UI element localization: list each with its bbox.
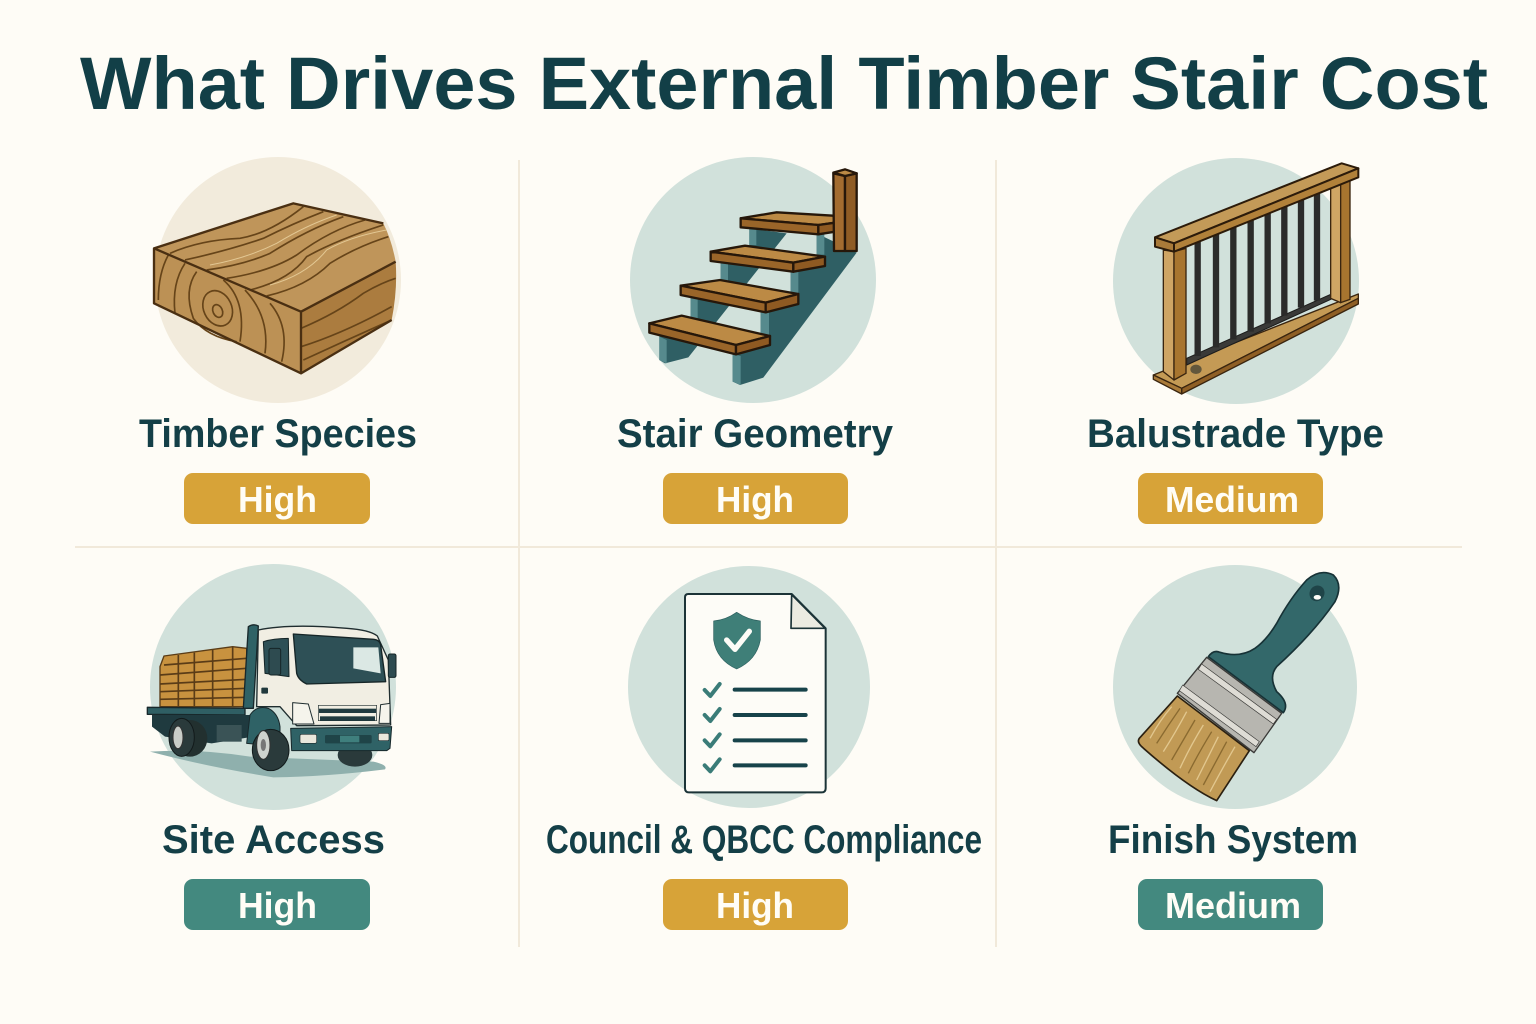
- badge: medium: Medium: [1165, 885, 1301, 926]
- badge: high: High: [238, 885, 317, 926]
- badge: high: High: [716, 885, 794, 926]
- badge: medium: [1138, 879, 1323, 930]
- icon: timber stairs: [630, 157, 876, 403]
- badge: high: [663, 473, 848, 524]
- panel: council and QBCC compliance: [546, 566, 982, 930]
- icon: balustrade: [1113, 158, 1359, 404]
- icon: timber block: [154, 157, 401, 403]
- badge: high: [184, 473, 370, 524]
- panel: timber species: [139, 157, 417, 524]
- icon: delivery truck: [147, 564, 396, 810]
- panel: stair geometry: [617, 157, 894, 524]
- panel: site access: [147, 564, 396, 930]
- icon: paint brush: [1113, 565, 1357, 809]
- label: finish system: Finish System: [1108, 818, 1358, 862]
- panel: balustrade type: [1087, 158, 1384, 524]
- badge: medium: [1138, 473, 1323, 524]
- label: stair geometry: Stair Geometry: [617, 412, 894, 456]
- badge: high: High: [716, 479, 794, 520]
- icon: compliance document: [628, 566, 870, 808]
- panel: finish system: [1108, 565, 1358, 930]
- label: site access: Site Access: [162, 818, 385, 862]
- badge: high: [184, 879, 370, 930]
- title: What Drives External Timber Stair Cost: [80, 42, 1488, 125]
- label: balustrade type: Balustrade Type: [1087, 412, 1384, 456]
- label: timber species: Timber Species: [139, 412, 417, 456]
- label: council and QBCC compliance: Council & QBCC Compliance: [546, 818, 982, 862]
- badge: medium: Medium: [1165, 479, 1299, 520]
- badge: high: [663, 879, 848, 930]
- badge: high: High: [238, 479, 317, 520]
